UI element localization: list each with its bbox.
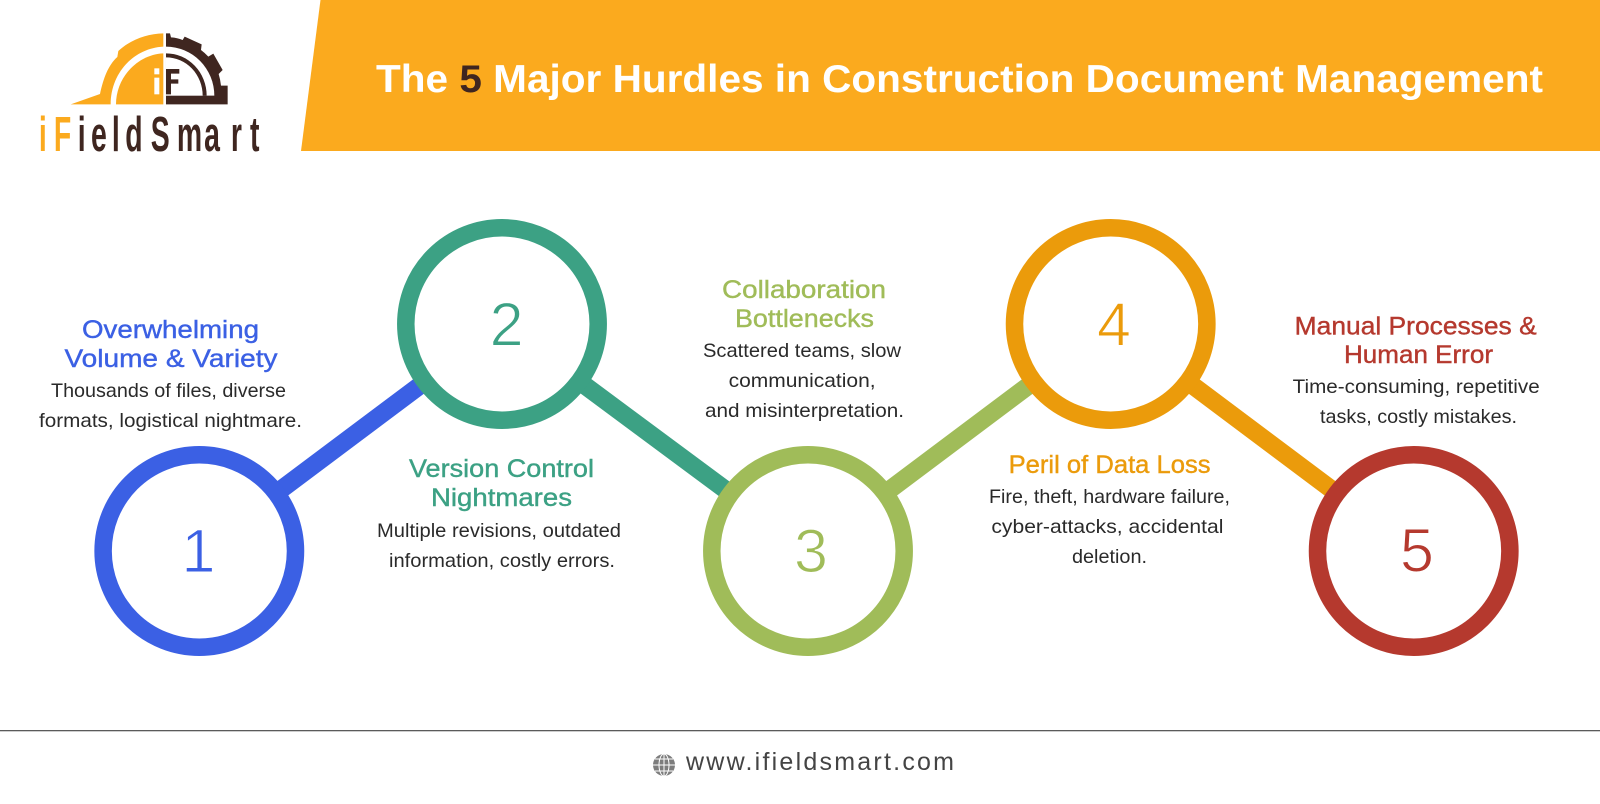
text block 2: Version Control Nightmares: Nightmares (431, 484, 572, 512)
text block 1: Overwhelming Volume & Variety: Overwhelming (82, 316, 259, 344)
text block 4: Peril of Data Loss: cyber-attacks, accidental (991, 516, 1223, 538)
title: The 5 Major Hurdles in Construction Document Management (376, 58, 1543, 101)
footer website: www.ifieldsmart.com (685, 748, 954, 776)
step circle 1: 1 (182, 517, 215, 585)
text block 1: Overwhelming Volume & Variety: Thousands of files, diverse (51, 380, 286, 402)
logo: iFieldSmart (39, 33, 259, 162)
header banner (301, 0, 1600, 151)
connector: 1 to 2 (199, 324, 502, 551)
step circle 1 (103, 455, 296, 647)
text block 3: Collaboration Bottlenecks: and misinterpretation. (705, 400, 904, 422)
text block 3: Collaboration Bottlenecks: Scattered teams, slow (703, 340, 902, 362)
text block 3: Collaboration Bottlenecks: Collaboration (722, 276, 886, 304)
text block 1: Overwhelming Volume & Variety: formats, logistical nightmare. (39, 410, 302, 432)
text block 2: Version Control Nightmares (377, 455, 621, 572)
text block 4: Peril of Data Loss: deletion. (1072, 546, 1147, 568)
step circle 3 (712, 455, 904, 647)
text block 2: Version Control Nightmares: Multiple revisions, outdated (377, 520, 621, 542)
step circle 2 (406, 228, 598, 420)
text block 4: Peril of Data Loss: Peril of Data Loss (1009, 451, 1211, 479)
text block 3: Collaboration Bottlenecks: Bottlenecks (735, 305, 874, 333)
connector: 2 to 3 (502, 324, 808, 551)
text block 4: Peril of Data Loss (989, 451, 1230, 568)
text block 5: Manual Processes & Human Error: Time-consuming, repetitive (1293, 376, 1540, 398)
text block 1: Overwhelming Volume & Variety (39, 316, 302, 432)
text block 1: Overwhelming Volume & Variety: Volume & Variety (64, 345, 278, 373)
step circle 5 (1318, 455, 1510, 647)
connector: 4 to 5 (1111, 324, 1414, 551)
text block 3: Collaboration Bottlenecks (703, 276, 904, 422)
text block 5: Manual Processes & Human Error: Human Error (1344, 341, 1493, 369)
text block 2: Version Control Nightmares: information, costly errors. (389, 550, 615, 572)
text block 2: Version Control Nightmares: Version Control (409, 455, 594, 483)
logo wordmark: iFieldSmart (39, 108, 259, 162)
icon: helmet and gear (71, 33, 228, 104)
step circle 5: 5 (1400, 516, 1434, 584)
text block 5: Manual Processes & Human Error (1293, 313, 1540, 428)
text block 5: Manual Processes & Human Error: tasks, costly mistakes. (1320, 406, 1517, 428)
step circle 3: 3 (794, 517, 828, 585)
icon: globe (653, 754, 675, 776)
connector: 3 to 4 (808, 324, 1111, 551)
step circle 4: 4 (1097, 290, 1131, 358)
text block 4: Peril of Data Loss: Fire, theft, hardware failure, (989, 486, 1230, 508)
step circle 4 (1014, 228, 1207, 420)
step circle 2: 2 (490, 290, 524, 358)
text block 5: Manual Processes & Human Error: Manual Processes & (1295, 313, 1537, 341)
text block 3: Collaboration Bottlenecks: communication, (729, 370, 876, 392)
